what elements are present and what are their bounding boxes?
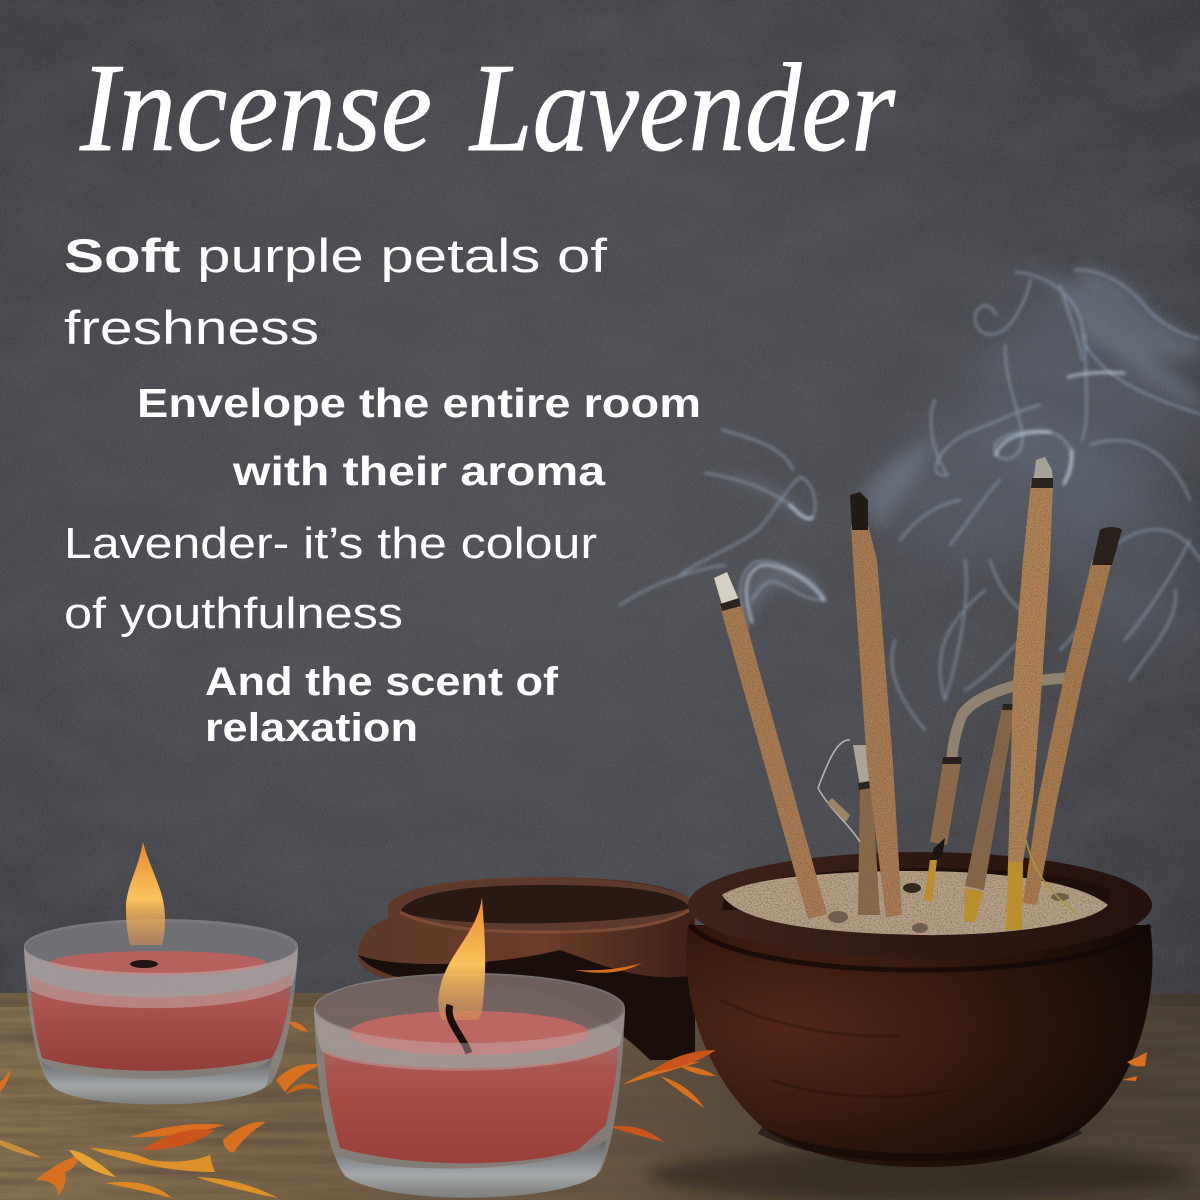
front candle frosted rim xyxy=(314,1008,625,1071)
scattered marigold petals xyxy=(0,963,1147,1198)
title xyxy=(79,39,896,178)
back wooden lid xyxy=(358,877,695,1060)
front candle flame xyxy=(438,897,485,1020)
text: envelope the room xyxy=(137,380,701,494)
left candle frosted rim xyxy=(24,946,298,1008)
stick one xyxy=(714,572,827,919)
front tealight candle xyxy=(314,973,625,1198)
title: Lavender xyxy=(468,39,896,178)
text: soft purple petals xyxy=(64,229,608,354)
text: colour of youthfulness: of youthfulness xyxy=(64,589,403,638)
left tealight candle xyxy=(24,919,298,1104)
left candle flame xyxy=(126,842,165,945)
large wooden incense bowl xyxy=(686,852,1152,1167)
text: soft purple petals: Soft purple petals of xyxy=(64,229,608,282)
stick four xyxy=(1023,527,1122,905)
incense sticks xyxy=(714,457,1122,930)
text: envelope the room: with their aroma xyxy=(232,448,606,494)
smoke xyxy=(620,268,1200,730)
title: Incense xyxy=(79,39,432,178)
short burnt stick with ash xyxy=(818,740,880,915)
table top xyxy=(0,993,1200,1200)
text: scent of relaxation xyxy=(205,660,559,750)
bent burnt stick xyxy=(924,678,1067,903)
text: colour of youthfulness xyxy=(64,519,597,638)
smoke veils xyxy=(705,268,1200,625)
stick three xyxy=(1006,457,1078,930)
front candle wick xyxy=(449,1005,469,1053)
wick xyxy=(130,960,158,968)
text: scent of relaxation: And the scent of xyxy=(205,660,559,704)
text: colour of youthfulness: Lavender- it’s the colour xyxy=(64,519,597,568)
text: scent of relaxation: relaxation xyxy=(205,706,418,750)
stick five xyxy=(964,704,1015,922)
text: soft purple petals: freshness xyxy=(64,301,319,354)
text: envelope the room: Envelope the entire room xyxy=(137,380,701,426)
sand xyxy=(722,871,1108,935)
stick two xyxy=(850,492,902,917)
